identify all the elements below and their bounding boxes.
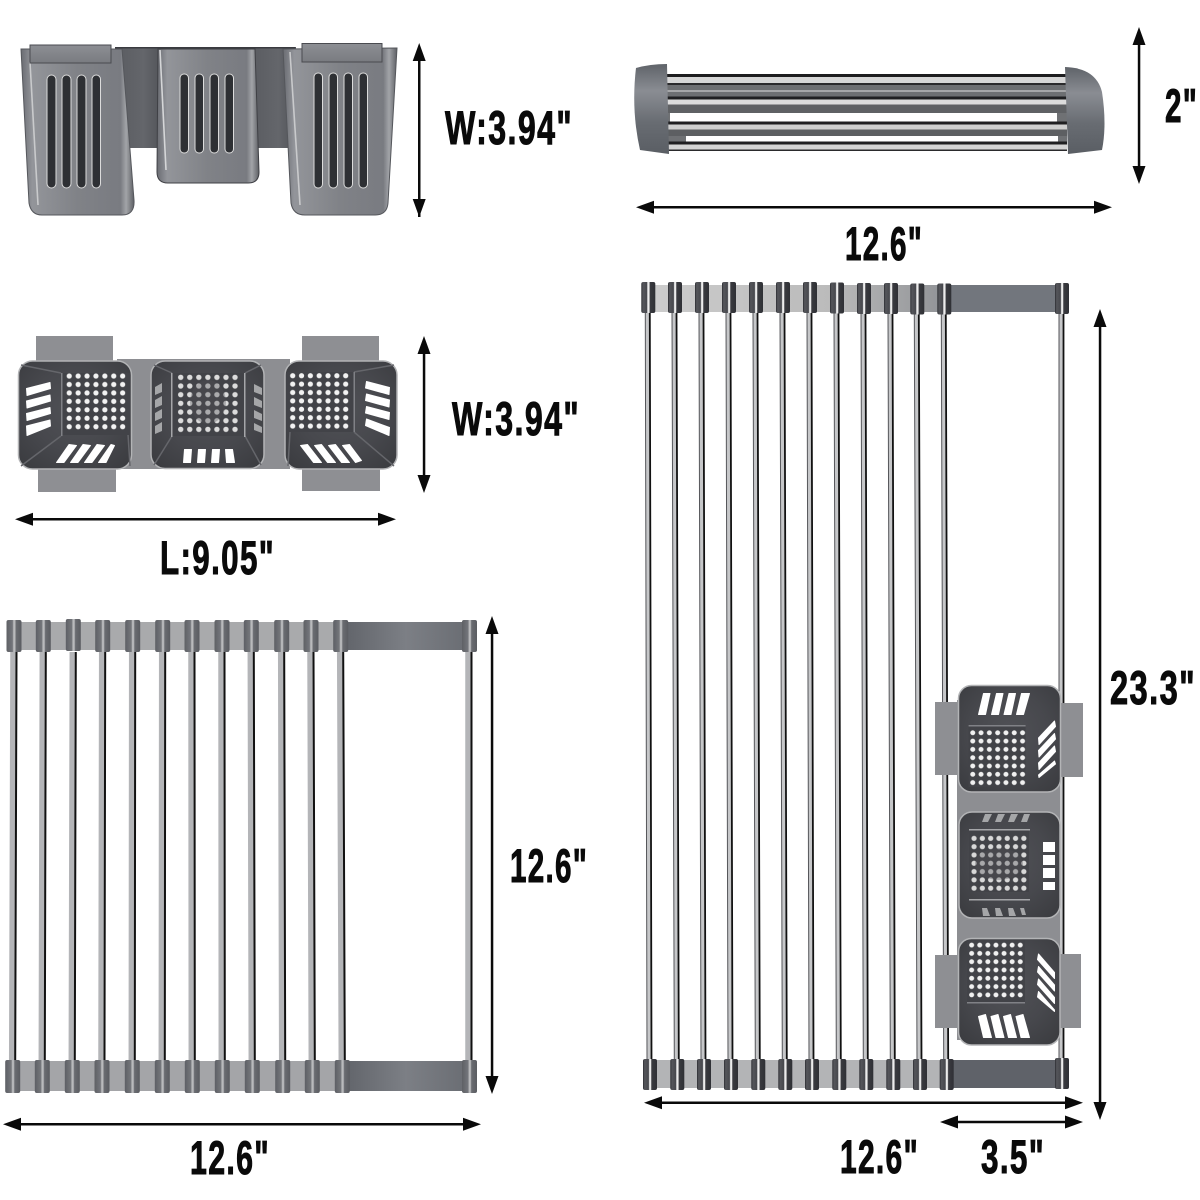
label: flat rack width: 12.6" [190,1131,270,1184]
right cup [283,48,397,215]
label: top view width: W:3.94" [452,392,580,445]
rolled steel rods [667,74,1067,151]
top bar [6,619,477,652]
arrow: top view width [418,336,430,493]
vertical caddy [935,686,1083,1045]
top bar [641,282,1069,314]
hook clips [36,336,380,492]
center basket [151,361,264,468]
arrow: rolled rack length [636,201,1112,214]
left cup [21,49,134,215]
label: rolled rack length: 12.6" [845,217,923,270]
panel: caddy side view [21,44,397,215]
arrow: flat rack height [486,616,498,1094]
arrow: side view height [413,43,426,217]
spine [957,700,1060,1040]
left basket [18,361,132,469]
arrow: flat rack width [3,1118,481,1131]
back panel [115,47,296,148]
label: caddy width: 3.5" [981,1130,1045,1183]
arrow: rolled rack height [1132,27,1146,184]
panel: rolled rack [634,64,1104,154]
label: extended rack width: 12.6" [840,1130,919,1183]
panel: caddy top view [18,336,397,492]
basket two [959,812,1060,918]
hook clips [30,44,382,63]
basket one [958,686,1060,792]
bottom bar [5,1060,477,1093]
left end cap [634,64,669,154]
rods [12,652,471,1060]
bottom bar [643,1058,1069,1090]
right end cap [1065,67,1104,154]
label: flat rack height: 12.6" [510,839,588,892]
rods [645,313,1064,1060]
arrow: extended rack height [1094,309,1106,1120]
label: side view width: W:3.94" [445,101,573,154]
hook clips [935,702,1083,1028]
arrow: extended rack width [644,1096,1083,1109]
panel: extended rack with caddy [641,282,1083,1090]
spine [117,359,290,469]
label: top view length: L:9.05" [160,531,275,584]
right basket [285,361,397,469]
center cup [157,49,259,183]
arrow: top view length [15,513,396,526]
panel: flat rack short [5,619,477,1093]
arrow: caddy width [940,1116,1083,1128]
basket three [958,938,1060,1045]
